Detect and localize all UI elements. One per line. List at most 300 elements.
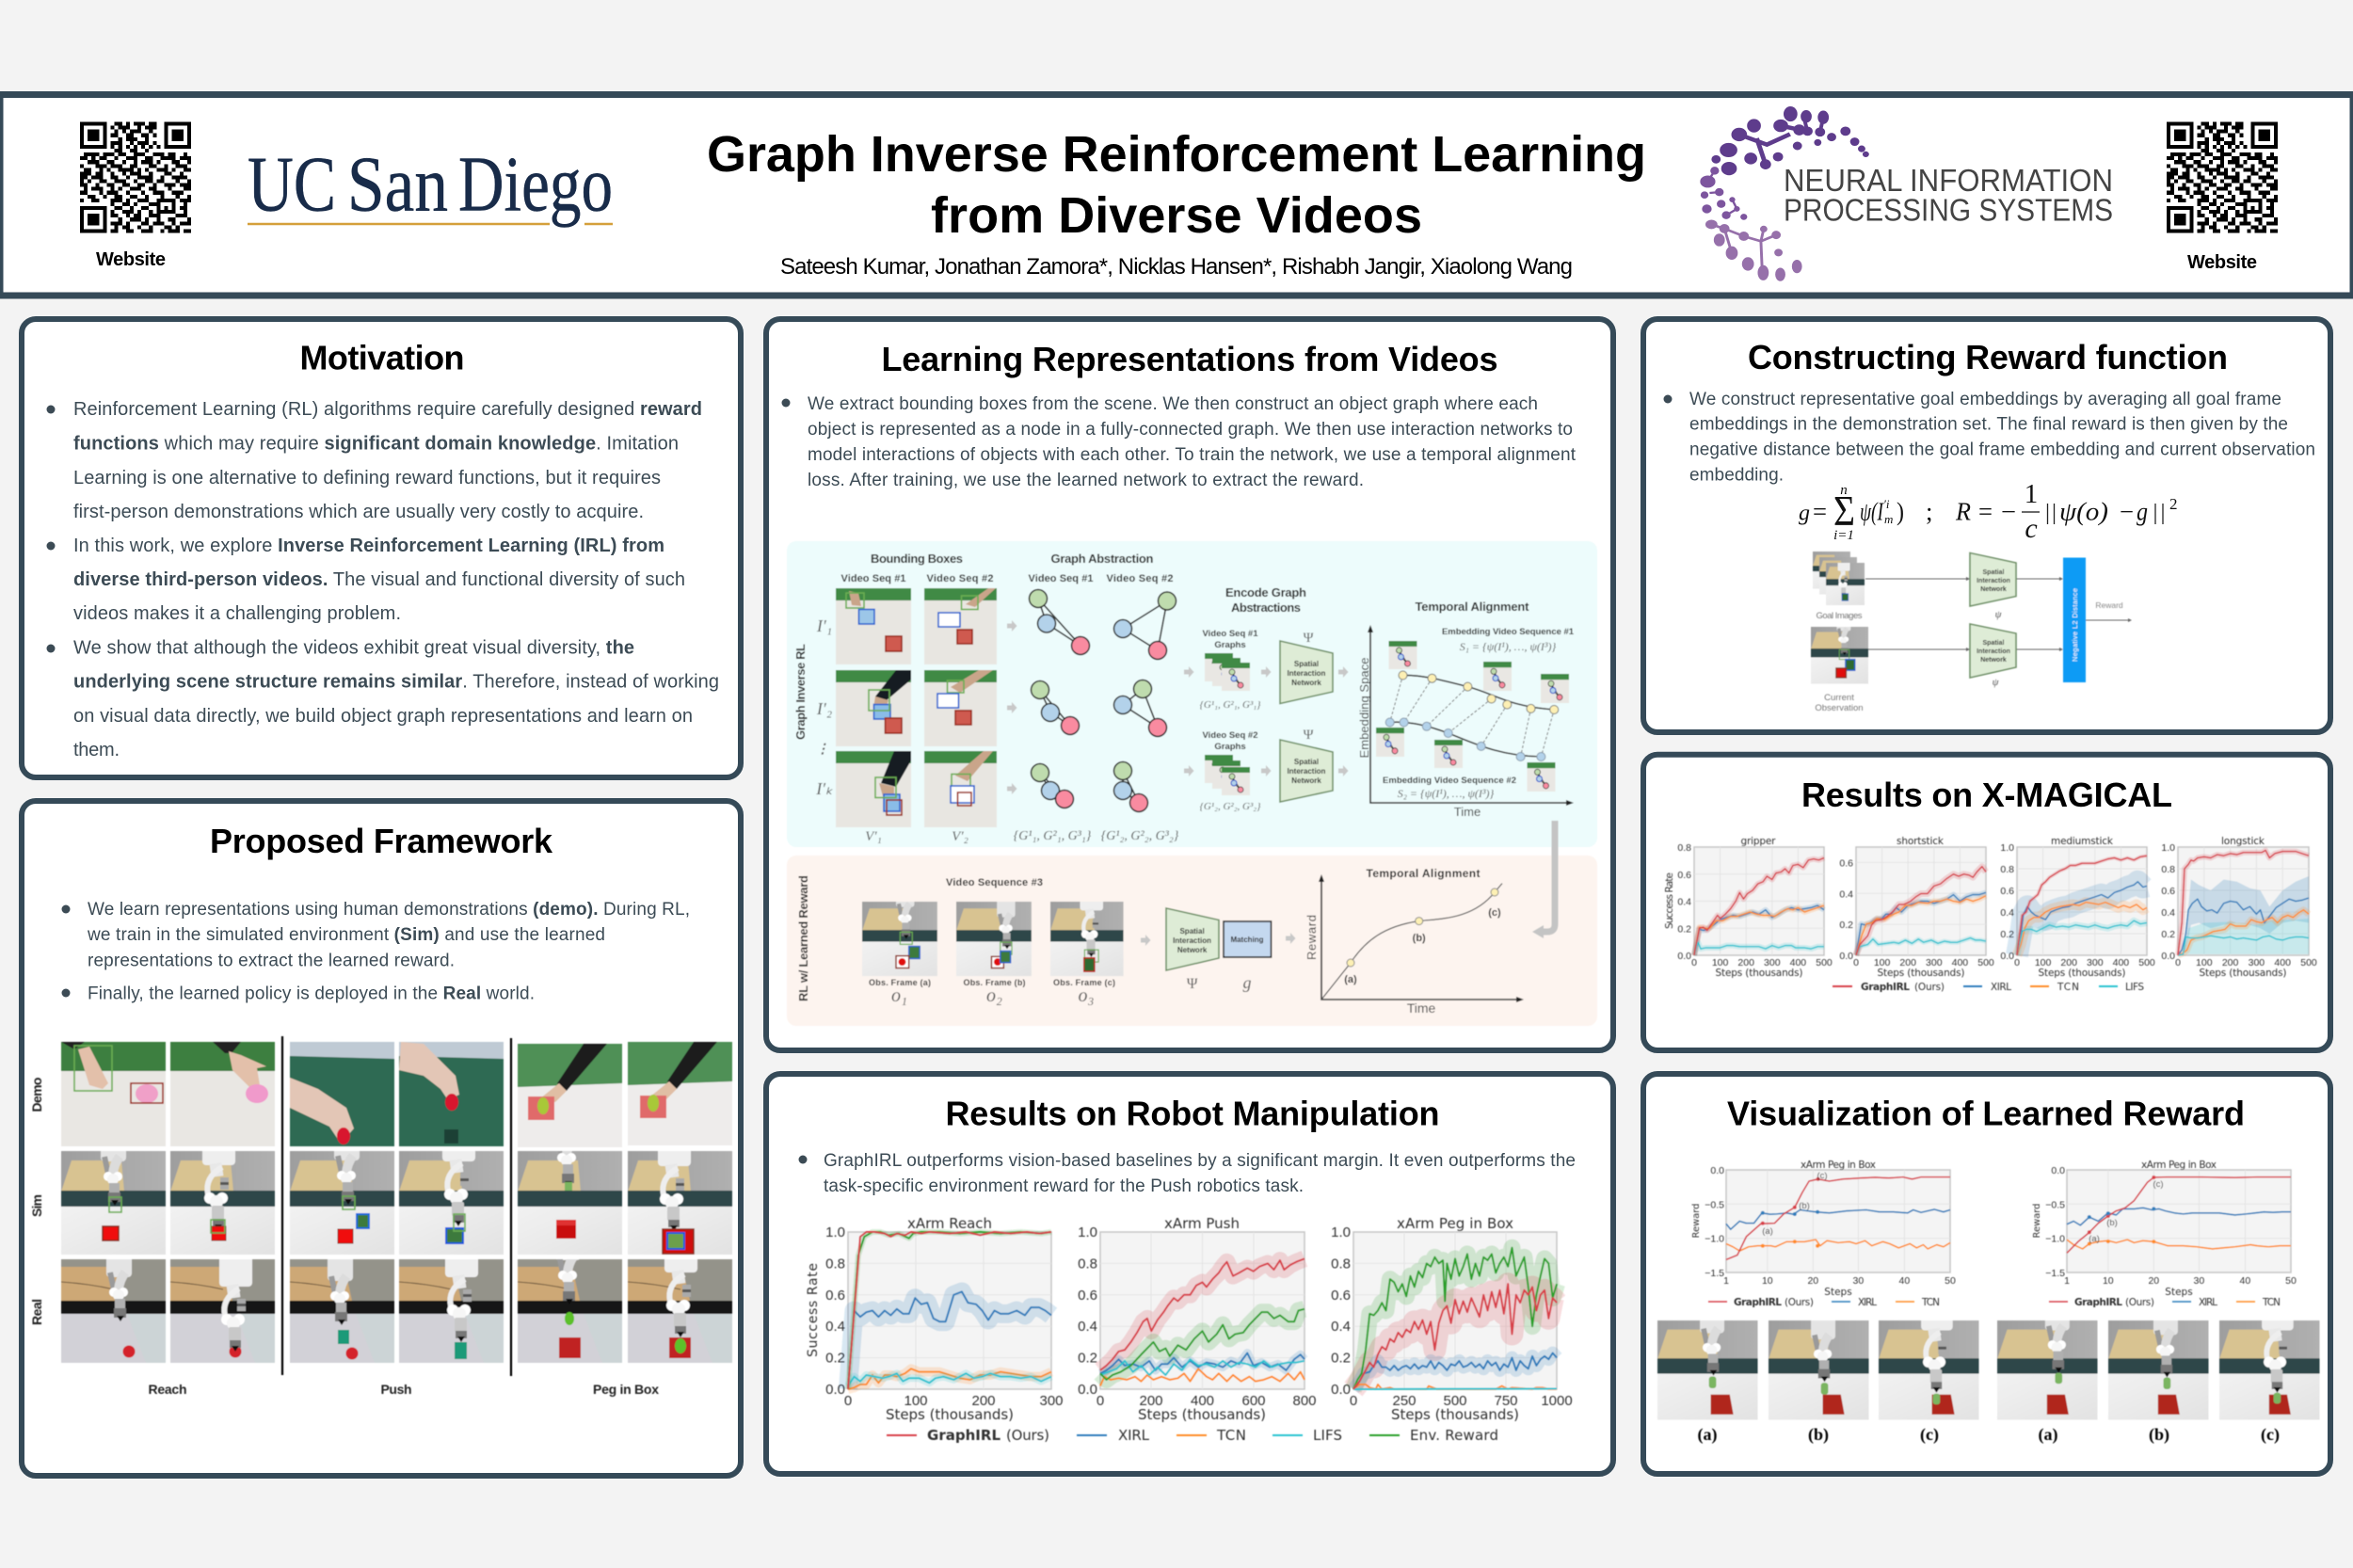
constructing reward text (1664, 390, 2315, 486)
legend A: XIRL (1858, 1297, 1877, 1308)
chart: xArm Peg in Box: 0.0 (1331, 1382, 1351, 1398)
column labels: Push (380, 1382, 412, 1397)
chart: reward B: xArm Peg in Box (2141, 1160, 2217, 1171)
formula: 1 (2025, 479, 2038, 509)
chart: shortstick: 0.0 (1839, 951, 1853, 962)
temporal alignment embedding plot: S₁ = {ψ(I¹), …, ψ(I³)} (1460, 640, 1557, 653)
heading: proposed framework: Proposed Framework (210, 822, 553, 860)
row labels: Demo (29, 1077, 44, 1112)
website label left: Website (96, 249, 166, 270)
title: Graph Inverse Reinforcement Learning (707, 126, 1646, 183)
formula: = (1978, 497, 1993, 525)
formula: ψ(I (1860, 497, 1884, 525)
chart: reward B: 30 (2194, 1275, 2204, 1287)
panel: motivation (22, 319, 741, 777)
robot manipulation text (798, 1151, 1576, 1196)
chart: xArm Push: xArm Push (1164, 1215, 1240, 1232)
formula: − (2001, 497, 2016, 525)
bounding boxes column: V′₂ (952, 829, 968, 844)
row 2 (836, 670, 911, 746)
learning text: We extract bounding boxes from the scene. We then construct an object graph where each (808, 394, 1538, 414)
chart: reward A: Steps (1824, 1287, 1852, 1298)
chart: shortstick: 0.2 (1839, 920, 1853, 931)
reward over time plot: Time (1407, 1000, 1436, 1016)
legend B: TCN (2262, 1297, 2281, 1308)
chart: mediumstick: 0.6 (2000, 886, 2014, 897)
legend A: TCN (1921, 1297, 1940, 1308)
chart: shortstick: 200 (1899, 957, 1916, 968)
bounding boxes column: I′₂ (816, 699, 832, 718)
network and matching blocks: g (1242, 973, 1252, 992)
motivation text: on visual data directly, we build object graph representations and learn on (73, 706, 693, 727)
website label right: Website (2187, 252, 2257, 273)
chart: shortstick: 0.4 (1839, 888, 1853, 900)
chart: xArm Peg in Box: 0 (1350, 1393, 1357, 1409)
chart: xArm Reach: 0.2 (825, 1351, 845, 1367)
reward over time plot: (c) (1488, 907, 1501, 919)
chart: xArm Push: 0.8 (1078, 1256, 1097, 1272)
motivation text: first-person demonstrations which are usually very costly to acquire. (73, 502, 644, 522)
chart: reward A: −1.0 (1705, 1234, 1724, 1245)
background: graph inverse RL (787, 541, 1597, 847)
framework text: Finally, the learned policy is deployed in the Real world. (88, 984, 535, 1003)
chart: reward B: Steps (2165, 1287, 2193, 1298)
legend: robot manipulation: TCN (1216, 1427, 1246, 1444)
encode graph abstractions: Graphs (1214, 742, 1246, 752)
chart: reward B: (b) (2106, 1218, 2118, 1228)
motivation text: underlying scene structure remains similar. Therefore, instead of working (73, 672, 719, 693)
chart: reward B: 40 (2240, 1275, 2250, 1287)
chart: xArm Reach: Steps (thousands) (886, 1406, 1014, 1423)
legend: robot manipulation: LIFS (1313, 1427, 1342, 1444)
chart: xArm Push: 200 (1139, 1393, 1163, 1409)
y label B: Reward (2032, 1203, 2042, 1239)
current observation: Current (1824, 693, 1854, 703)
chart: longstick: 0.2 (2161, 929, 2175, 940)
legend: robot manipulation: XIRL (1118, 1427, 1150, 1444)
chart: shortstick: 0 (1853, 957, 1859, 968)
chart: longstick: 0.6 (2161, 886, 2175, 897)
panel: constructing reward function (1643, 319, 2330, 732)
motivation text: videos makes it a challenging problem. (73, 603, 401, 624)
charts: X-MAGICAL (1664, 836, 2317, 993)
spatial interaction networks: ψ (1993, 677, 1999, 688)
charts: robot manipulation (806, 1215, 1573, 1444)
UC San Diego logo (248, 141, 613, 228)
chart: gripper: gripper (1741, 836, 1776, 847)
formula: n (1840, 483, 1848, 498)
row 3 (836, 751, 911, 827)
chart: xArm Reach: 100 (904, 1393, 928, 1409)
chart: longstick: 0.0 (2161, 951, 2175, 962)
chart: gripper: 200 (1737, 957, 1754, 968)
chart: longstick: 0.8 (2161, 864, 2175, 875)
formula: ψ(o) (2059, 497, 2108, 525)
NeurIPS logo (1702, 107, 2113, 280)
constructing reward text: embeddings in the demonstration set. The final reward is then given by the (1689, 414, 2288, 435)
formula: = (1813, 497, 1827, 525)
constructing reward text: We construct representative goal embeddings by averaging all goal frame (1689, 390, 2281, 409)
temporal alignment embedding plot: Embedding Video Sequence #1 (1442, 627, 1575, 637)
formula: ′i (1883, 497, 1890, 511)
chart: xArm Push: 0.2 (1078, 1351, 1097, 1367)
bounding boxes column (815, 552, 997, 844)
row 1 (836, 588, 911, 664)
reward over time plot (1305, 867, 1524, 1016)
chart: gripper: 0.8 (1677, 842, 1691, 854)
formula: g (2137, 497, 2148, 525)
pipeline arrows (1865, 577, 2132, 651)
trajectory frames (1657, 1293, 2320, 1420)
spatial interaction networks: Network (1980, 586, 2007, 593)
chart: xArm Reach: 200 (971, 1393, 996, 1409)
bounding boxes column: I′ₖ (815, 779, 833, 798)
chart: gripper: 0.6 (1677, 870, 1691, 881)
network and matching blocks: Interaction (1173, 936, 1211, 945)
legend A (1708, 1297, 1940, 1308)
chart: reward B: 0.0 (2051, 1165, 2065, 1176)
legend B: XIRL (2199, 1297, 2217, 1308)
encode graph abstractions: Video Seq #1 (1203, 629, 1258, 639)
heading: learning representations: Learning Representations from Videos (881, 340, 1498, 378)
temporal alignment embedding plot (1357, 600, 1575, 819)
chart: reward A: (a) (1762, 1226, 1773, 1237)
heading: motivation: Motivation (299, 339, 465, 376)
legend B: (Ours) (2125, 1297, 2154, 1308)
NeurIPS logo: NEURAL INFORMATION (1784, 163, 2113, 198)
video sequence 3 frames: Obs. Frame (a) (869, 978, 931, 987)
chart: reward A: −0.5 (1705, 1199, 1724, 1210)
learning text: object is represented as a node in a fully-connected graph. We then use interaction networks to (808, 420, 1573, 440)
real row images (60, 1258, 733, 1363)
chart: xArm Push: 800 (1292, 1393, 1317, 1409)
chart: shortstick: Steps (thousands) (1877, 968, 1965, 979)
chart: shortstick: 500 (1977, 957, 1994, 968)
formula: ; (1926, 497, 1933, 525)
formula (1799, 479, 2178, 544)
bounding boxes column: Bounding Boxes (871, 552, 963, 566)
encode graph abstractions: Network (1291, 679, 1321, 687)
header banner (0, 94, 2353, 296)
encode graph abstractions (1199, 585, 1333, 812)
side labels: RL w/ Learned Reward (796, 875, 810, 1001)
chart: xArm Push: 400 (1191, 1393, 1214, 1409)
formula: Σ (1833, 488, 1855, 535)
y axis label: Success Rate (806, 1263, 821, 1357)
reward over time plot: Temporal Alignment (1367, 867, 1480, 880)
formula: m (1884, 512, 1893, 526)
encode graph abstractions: Encode Graph (1225, 585, 1306, 600)
framework text: we train in the simulated environment (Sim) and use the learned (87, 925, 605, 945)
chart: xArm Peg in Box: xArm Peg in Box (1397, 1215, 1513, 1232)
learning text: loss. After training, we use the learned network to extract the reward. (808, 471, 1364, 490)
video sequence 3 frames: o₁ (891, 985, 907, 1006)
panel: results on X-MAGICAL (1643, 755, 2330, 1050)
chart: longstick: 1.0 (2161, 842, 2175, 854)
chart: xArm Push (1078, 1215, 1317, 1423)
side labels (793, 644, 810, 1001)
chart: xArm Reach: 0.4 (825, 1319, 845, 1335)
reward over time plot: (a) (1344, 974, 1357, 985)
chart: reward A: 20 (1807, 1275, 1818, 1287)
reward over time plot: Reward (1305, 915, 1319, 960)
heading: X-MAGICAL: Results on X-MAGICAL (1801, 776, 2172, 814)
motivation text: In this work, we explore Inverse Reinforcement Learning (IRL) from (73, 536, 664, 556)
sim row images (60, 1150, 733, 1256)
network and matching blocks (1166, 908, 1271, 992)
motivation text (47, 399, 719, 760)
chart: mediumstick: 0.8 (2000, 864, 2014, 875)
column labels: Peg in Box (593, 1382, 659, 1397)
chart: mediumstick: 1.0 (2000, 842, 2014, 854)
video sequence 3 frames (862, 877, 1124, 1006)
chart: xArm Reach: 0.6 (825, 1288, 845, 1304)
constructing reward text: negative distance between the goal frame embedding and current observation (1689, 440, 2315, 459)
chart: mediumstick: 0.0 (2000, 951, 2014, 962)
chart: gripper: 400 (1790, 957, 1806, 968)
chart: xArm Push: 0.4 (1078, 1319, 1097, 1335)
goal image stack: Goal Images (1817, 611, 1863, 621)
chart: shortstick: 300 (1926, 957, 1943, 968)
chart: longstick: 0 (2175, 957, 2181, 968)
chart: mediumstick: 0 (2014, 957, 2020, 968)
chart: reward A: (b) (1799, 1201, 1810, 1211)
video sequence 3 frames: Video Sequence #3 (946, 877, 1043, 888)
chart: xArm Push: 0.0 (1078, 1382, 1097, 1398)
chart: mediumstick: mediumstick (2051, 836, 2114, 847)
motivation text: them. (73, 740, 120, 760)
chart: reward A: 10 (1762, 1275, 1773, 1287)
chart: xArm Push: 1.0 (1078, 1224, 1097, 1240)
chart: mediumstick: 100 (2035, 957, 2052, 968)
encode graph abstractions: Network (1291, 776, 1321, 785)
bounding boxes column: Video Seq #1 (841, 573, 905, 584)
chart: reward B (2045, 1160, 2297, 1298)
row labels (29, 1077, 44, 1325)
chart: reward A: 1 (1723, 1275, 1729, 1287)
chart: shortstick (1839, 836, 1994, 979)
chart: mediumstick: 500 (2138, 957, 2155, 968)
QR code left (80, 124, 191, 231)
chart: xArm Reach: 0.0 (825, 1382, 845, 1398)
chart: longstick: 100 (2196, 957, 2213, 968)
frame labels: (a) (2039, 1425, 2057, 1445)
encode graph abstractions: Abstractions (1231, 600, 1301, 615)
chart: reward B: −1.0 (2045, 1234, 2065, 1245)
chart: reward B: 1 (2064, 1275, 2070, 1287)
graph abstraction column (1014, 552, 1179, 843)
network and matching blocks: Ψ (1187, 976, 1198, 992)
chart: xArm Peg in Box: 0.2 (1331, 1351, 1351, 1367)
chart: reward B: 50 (2285, 1275, 2297, 1287)
encode graph abstractions: Interaction (1288, 669, 1326, 678)
encode graph abstractions: Graphs (1214, 640, 1246, 650)
network and matching blocks: Matching (1230, 936, 1264, 944)
chart: xArm Reach: xArm Reach (907, 1215, 992, 1232)
chart: xArm Reach: 0.8 (825, 1256, 845, 1272)
legend A: GraphIRL (1734, 1297, 1782, 1308)
bounding boxes column: V′₁ (865, 829, 882, 844)
chart: xArm Peg in Box: 750 (1494, 1393, 1518, 1409)
chart: gripper: 0.0 (1677, 951, 1691, 962)
legend A: (Ours) (1785, 1297, 1814, 1308)
chart: reward A: 0.0 (1710, 1165, 1724, 1176)
chart: longstick (2161, 836, 2317, 979)
chart: xArm Reach (825, 1215, 1064, 1423)
video sequence 3 frames: Obs. Frame (b) (964, 978, 1026, 987)
chart: longstick: 0.4 (2161, 907, 2175, 919)
encode graph abstractions: Ψ (1303, 631, 1314, 646)
graph abstraction column: Graph Abstraction (1050, 552, 1154, 566)
chart: longstick: 200 (2222, 957, 2239, 968)
bounding boxes column: I′₁ (816, 616, 832, 635)
chart: reward A: xArm Peg in Box (1801, 1160, 1876, 1171)
bounding boxes column: ⋮ (816, 743, 829, 757)
NeurIPS logo: PROCESSING SYSTEMS (1784, 192, 2113, 228)
spatial interaction networks: Interaction (1977, 578, 2010, 584)
legend: X-MAGICAL (1833, 982, 2144, 993)
learning text (781, 394, 1577, 490)
chart: reward A: 30 (1853, 1275, 1864, 1287)
goal image stack (1813, 552, 1865, 621)
current observation: Observation (1815, 703, 1864, 713)
legend: X-MAGICAL: GraphIRL (1861, 982, 1910, 993)
chart: reward A: (c) (1817, 1171, 1828, 1181)
formula: − (2120, 497, 2134, 525)
legend: X-MAGICAL: LIFS (2125, 982, 2144, 993)
chart: gripper: 0.4 (1677, 896, 1691, 907)
motivation text: functions which may require significant domain knowledge. Imitation (73, 433, 679, 454)
chart: xArm Reach: 1.0 (825, 1224, 845, 1240)
title (707, 126, 1646, 244)
QR code right (2167, 124, 2278, 231)
formula: c (2025, 513, 2038, 544)
chart: reward A: 40 (1899, 1275, 1910, 1287)
graph abstraction column: Video Seq #1 (1028, 573, 1094, 584)
chart: gripper: 0 (1691, 957, 1697, 968)
chart: shortstick: 400 (1952, 957, 1968, 968)
demo row images (61, 1042, 732, 1147)
chart: mediumstick: 300 (2087, 957, 2104, 968)
chart: xArm Reach: 0 (844, 1393, 852, 1409)
spatial interaction networks: Spatial (1983, 640, 2005, 647)
chart: gripper (1677, 836, 1833, 979)
encode graph abstractions: Video Seq #2 (1203, 730, 1257, 741)
legend: robot manipulation: Env. Reward (1410, 1427, 1498, 1444)
spatial interaction networks: Interaction (1977, 648, 2010, 655)
temporal alignment embedding plot: Time (1454, 805, 1481, 819)
side labels: Graph Inverse RL (793, 644, 808, 740)
negative L2 distance bar: Negative L2 Distance (2071, 588, 2079, 662)
robot manipulation text: task-specific environment reward for the Push robotics task. (824, 1176, 1304, 1196)
y label A: Reward (1691, 1203, 1702, 1239)
chart: mediumstick: 400 (2113, 957, 2129, 968)
frame labels: (a) (1698, 1425, 1717, 1445)
temporal alignment embedding plot: S₂ = {ψ(I¹), …, ψ(I³)} (1398, 787, 1495, 800)
chart: xArm Push: 600 (1241, 1393, 1266, 1409)
constructing reward text: embedding. (1689, 465, 1784, 486)
encode graph abstractions: Ψ (1303, 728, 1314, 743)
chart: xArm Peg in Box: 500 (1443, 1393, 1467, 1409)
task dividers (282, 1036, 511, 1376)
frame labels: (b) (2149, 1425, 2169, 1445)
chart: longstick: Steps (thousands) (2199, 968, 2287, 979)
network and matching blocks: Spatial (1179, 927, 1205, 936)
chart: xArm Push: 0 (1096, 1393, 1104, 1409)
chart: reward A: −1.5 (1705, 1268, 1724, 1279)
chart: xArm Peg in Box: 0.4 (1331, 1319, 1351, 1335)
encode graph abstractions: Spatial (1294, 758, 1319, 766)
chart: mediumstick: 0.2 (2000, 929, 2014, 940)
chart: reward A (1705, 1160, 1956, 1298)
robot manipulation text: GraphIRL outperforms vision-based baselines by a significant margin. It even outperforms the (824, 1151, 1576, 1171)
column labels (149, 1382, 659, 1397)
background: RL with learned reward (787, 856, 1597, 1026)
chart: reward A: 50 (1945, 1275, 1956, 1287)
current observation (1810, 627, 1869, 712)
video sequence 3 frames: o₂ (986, 985, 1002, 1006)
chart: reward B: (a) (2089, 1234, 2100, 1244)
formula: i=1 (1833, 528, 1854, 543)
bounding boxes column: Video Seq #2 (926, 573, 994, 584)
chart: xArm Push: 0.6 (1078, 1288, 1097, 1304)
arrow: training to reward (1532, 821, 1555, 938)
panel: learning representations from videos (766, 319, 1613, 1050)
image grid: demo, sim and real tasks (29, 1036, 732, 1397)
authors: Sateesh Kumar, Jonathan Zamora*, Nicklas Hansen*, Rishabh Jangir, Xiaolong Wang (780, 254, 1573, 280)
panel: visualization of learned reward (1643, 1074, 2330, 1474)
chart: reward B: 10 (2103, 1275, 2114, 1287)
spatial interaction networks: ψ (1995, 609, 2002, 620)
formula: 2 (2169, 495, 2178, 513)
chart: xArm Peg in Box: 1000 (1541, 1393, 1573, 1409)
chart: longstick: 400 (2274, 957, 2291, 968)
video sequence 3 frames: o₃ (1079, 985, 1095, 1006)
spatial interaction networks: Spatial (1983, 569, 2005, 576)
framework text: We learn representations using human demonstrations (demo). During RL, (88, 900, 690, 920)
reward charts and frames (1657, 1160, 2320, 1445)
heading: constructing reward: Constructing Reward function (1748, 338, 2228, 376)
frame labels: (c) (1920, 1425, 1939, 1445)
motivation text: We show that although the videos exhibit great visual diversity, the (73, 638, 634, 659)
chart: shortstick: shortstick (1897, 836, 1945, 847)
motivation text: Learning is one alternative to defining reward functions, but it requires (73, 468, 661, 488)
motivation text: diverse third-person videos. The visual and functional diversity of such (73, 569, 685, 590)
temporal alignment embedding plot: Embedding Video Sequence #2 (1383, 776, 1516, 786)
chart: shortstick: 100 (1874, 957, 1891, 968)
chart: gripper: 500 (1816, 957, 1833, 968)
panel: results on robot manipulation (766, 1074, 1613, 1474)
legend: X-MAGICAL: (Ours) (1914, 982, 1945, 993)
row labels: Sim (29, 1194, 44, 1217)
frame labels: (b) (1808, 1425, 1829, 1445)
chart: reward B: −1.5 (2045, 1268, 2065, 1279)
UC San Diego logo: Diego (458, 141, 613, 228)
negative L2 distance bar (2063, 557, 2086, 682)
chart: longstick: 300 (2249, 957, 2265, 968)
figure: reward pipeline (1811, 552, 2132, 713)
heading: visualization: Visualization of Learned Reward (1727, 1094, 2245, 1133)
chart: longstick: 500 (2300, 957, 2317, 968)
legend: robot manipulation: GraphIRL (927, 1427, 1000, 1444)
heading: robot manipulation: Results on Robot Manipulation (945, 1094, 1440, 1133)
network and matching blocks: Network (1177, 946, 1208, 954)
chart: gripper: 0.2 (1677, 923, 1691, 935)
temporal alignment embedding plot: Temporal Alignment (1416, 600, 1529, 614)
row labels: Real (29, 1299, 44, 1325)
encode graph abstractions: Spatial (1294, 660, 1319, 668)
chart: mediumstick: Steps (thousands) (2039, 968, 2125, 979)
